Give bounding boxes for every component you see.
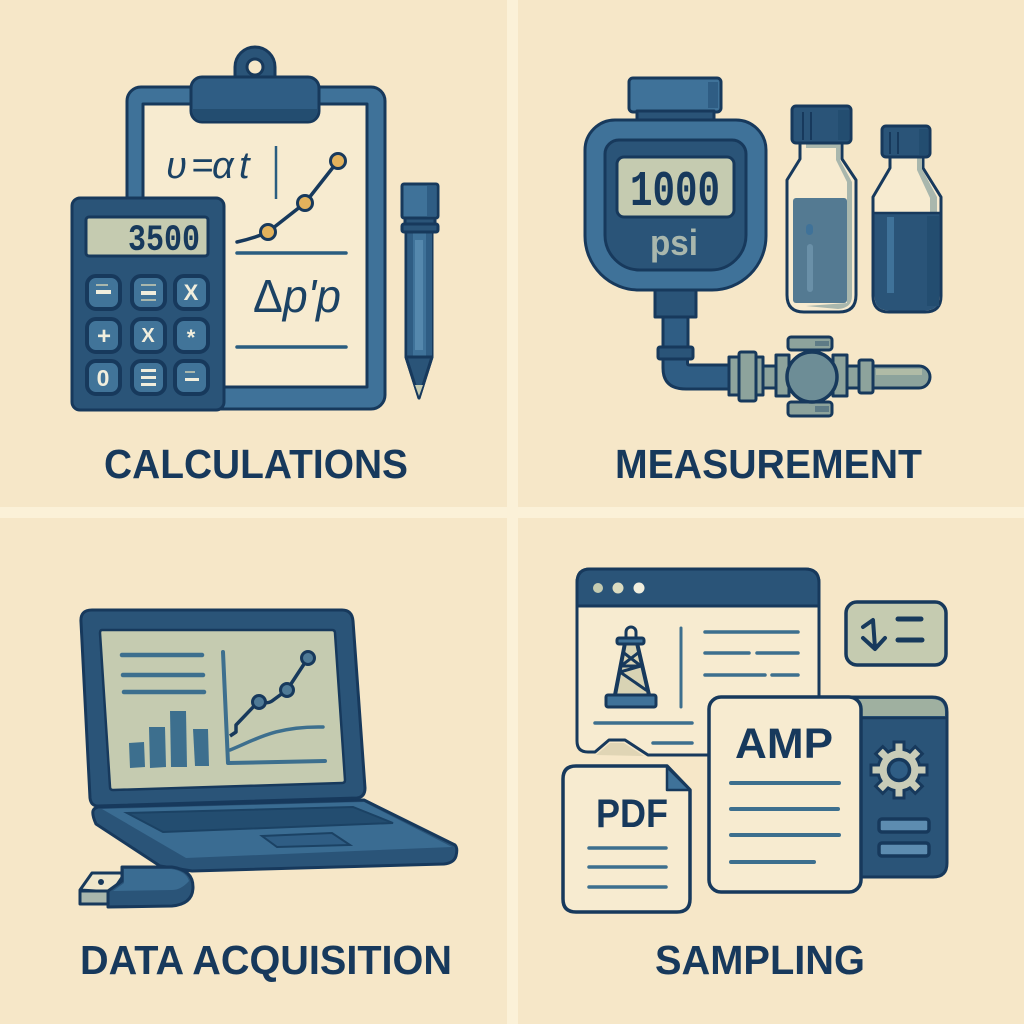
calculator keys: * — [187, 325, 196, 350]
document: AMP: AMP — [735, 720, 833, 768]
icon: usb drive — [80, 867, 193, 907]
icon: gear — [871, 742, 927, 798]
document: AMP — [709, 697, 861, 892]
document: PDF: PDF — [596, 792, 668, 836]
heading: sampling: SAMPLING — [655, 937, 865, 983]
icon: settings panel — [850, 697, 947, 877]
heading: calculations: CALCULATIONS — [104, 441, 408, 487]
line chart on screen — [223, 652, 325, 763]
formula: delta p: Δp'p — [253, 270, 341, 322]
line chart on clipboard — [237, 146, 346, 242]
panel: calculations — [0, 0, 507, 507]
icon: calculator — [72, 198, 224, 410]
browser text lines — [595, 632, 798, 743]
laptop lid — [81, 610, 365, 806]
icon: pencil — [402, 184, 438, 398]
calculator display — [86, 217, 208, 262]
calculator keys: X — [184, 280, 199, 305]
icon: browser window — [577, 569, 819, 756]
document: PDF — [563, 766, 690, 912]
calculator keys: X — [141, 325, 155, 347]
icon: pressure gauge — [585, 78, 766, 317]
icon: bottle, dark sample — [873, 126, 941, 312]
panel: measurement — [518, 0, 1024, 507]
panel: data acquisition — [0, 518, 507, 1024]
icon: sort list badge — [846, 602, 946, 665]
heading: data acquisition: DATA ACQUISITION — [80, 937, 452, 983]
gauge display: 1000 — [630, 164, 720, 221]
heading: measurement: MEASUREMENT — [615, 441, 922, 487]
laptop base — [93, 800, 457, 871]
unit label: psi: psi — [650, 222, 698, 263]
icon: bottle, half filled — [787, 106, 856, 312]
text lines on screen — [122, 655, 204, 692]
calculator keys — [87, 276, 208, 394]
icon: oil derrick — [606, 627, 656, 707]
icon: clipboard — [127, 47, 385, 409]
formula: v = at: υ=αt — [166, 145, 251, 187]
icon: laptop — [81, 610, 457, 871]
calculator keys: + — [97, 323, 111, 350]
calculator display: 3500 — [128, 220, 200, 262]
calculator keys: 0 — [97, 365, 109, 391]
panel: sampling — [518, 518, 1024, 1024]
icon: pipe and valve — [658, 317, 930, 416]
laptop screen — [100, 630, 345, 790]
bar chart on screen — [129, 711, 209, 768]
